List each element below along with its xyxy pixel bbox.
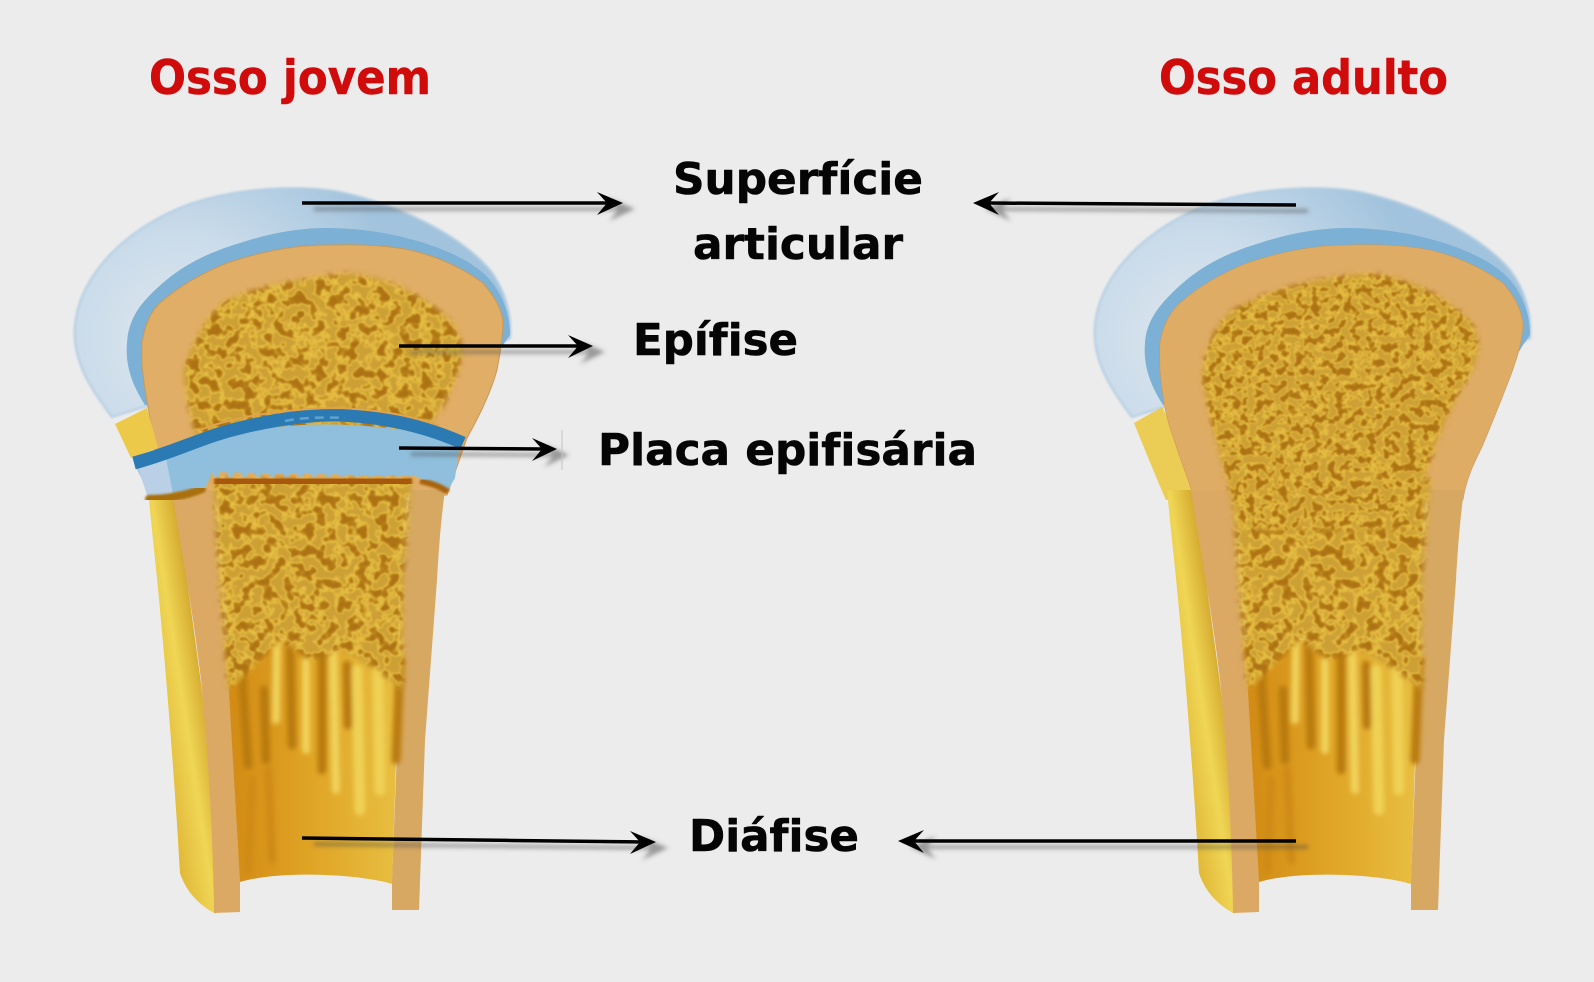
illustration: young bone [75,188,510,914]
label: Diáfise: Diáfise [689,811,859,862]
spongy bone [1199,270,1482,534]
label: Superfície articular [673,154,923,270]
arrow: young bone to Diáfise [302,831,656,854]
arrow: young bone to Superfície articular [302,192,623,215]
arrow: adult bone to Superfície articular [973,192,1296,215]
label: Placa epifisária: Placa epifisária [598,425,977,476]
arrow: young bone to Epífise [399,335,593,358]
title: Osso adulto: Osso adulto [1159,51,1448,106]
arrow: adult bone to Diáfise [898,830,1296,853]
label: Superfície articular: articular [693,219,903,270]
epiphysis spongy bone [180,270,465,436]
epiphysis compact bone [142,245,503,495]
compact bone [1160,245,1523,500]
diaphysis [1167,470,1464,914]
subchondral blue layer [1145,228,1530,405]
subchondral blue layer [127,228,510,405]
diaphysis [148,470,445,914]
arrow: young bone to Placa epifisária [399,438,557,461]
label: Epífise: Epífise [633,315,798,366]
periosteum [1134,407,1210,500]
articular cartilage [1095,188,1530,417]
title: Osso jovem: Osso jovem [149,51,431,106]
articular cartilage [75,188,510,417]
epiphyseal plate [134,408,463,499]
illustration: adult bone [1095,188,1530,914]
periosteum above plate [115,408,158,458]
label: Superfície articular: Superfície [673,154,923,205]
